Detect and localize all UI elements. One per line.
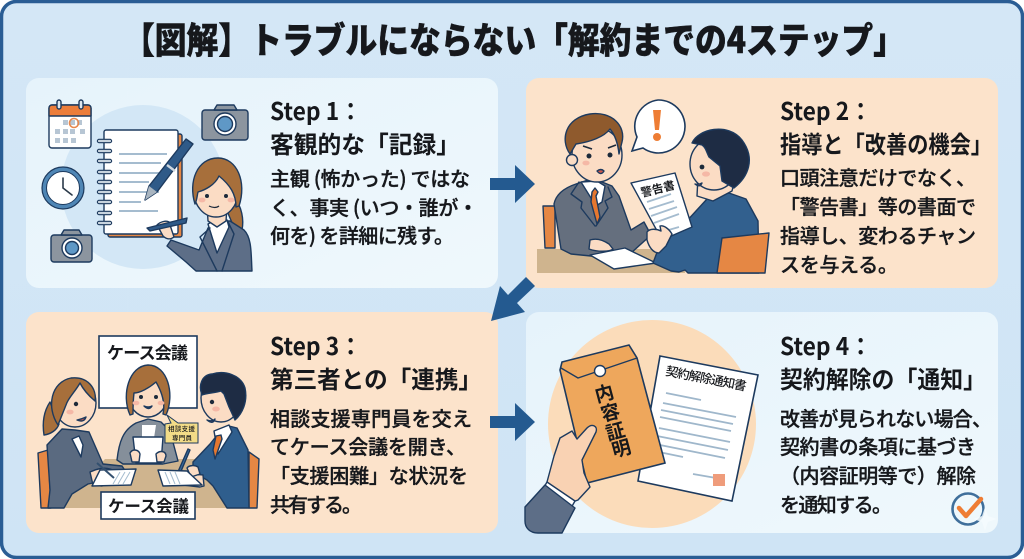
step 1 text: [270, 92, 478, 249]
step 4 text: [780, 327, 992, 518]
panel: step 1: [26, 78, 498, 288]
step 4 text: を通知する。: [780, 489, 892, 518]
paper on table: [590, 248, 656, 269]
step 1 text: 客観的な「記録」: [270, 125, 460, 160]
step 1 text: く、事実 (いつ・誰が・: [270, 192, 478, 221]
step 2 text: Step 2：: [780, 92, 872, 127]
step 2 text: 指導と「改善の機会」: [780, 125, 992, 160]
illustration: certified mail: [525, 320, 758, 533]
person: man right: [177, 373, 249, 508]
step 2 text: 指導し、変わるチャン: [780, 220, 976, 249]
icon: check mark: [952, 494, 997, 531]
person: supervisor: [554, 114, 651, 258]
envelope: [560, 345, 665, 483]
illustration: warning meeting: [537, 100, 769, 273]
person: woman left: [43, 378, 126, 508]
termination notice: 契約解除通知書: [664, 360, 748, 395]
panel: step 4: [525, 312, 998, 533]
icon: camera top: [202, 105, 248, 140]
chair right: [717, 233, 769, 273]
pen: [145, 139, 193, 200]
chairs: [38, 450, 259, 508]
speech bubble: [632, 100, 685, 153]
icon: calendar: [49, 100, 91, 148]
chair left: [543, 206, 555, 248]
label: consultation specialist: 専門員: [172, 432, 192, 442]
warning document: 警告書: [639, 177, 676, 201]
panel: step 3: [26, 312, 498, 533]
icon: camera bottom: [51, 230, 92, 262]
step 2 text: [780, 92, 992, 278]
step 2 text: 口頭注意だけでなく、: [780, 162, 976, 191]
illustration: case meeting: [38, 336, 259, 519]
step 4 text: （内容証明等で）解除: [780, 460, 976, 489]
step 4 text: Step 4：: [780, 327, 872, 362]
person: woman writing: [147, 158, 252, 271]
step 3 text: 相談支援専門員を交え: [270, 403, 472, 432]
step 4 text: 改善が見られない場合、: [780, 403, 992, 432]
envelope: 容: [597, 396, 623, 427]
step 3 text: てケース会議を開き、: [270, 431, 466, 460]
step 1 text: 何を) を詳細に残す。: [270, 220, 454, 249]
notebook: [99, 130, 182, 237]
arrow: step 2 to step 3: [491, 277, 535, 321]
envelope: 内: [591, 377, 617, 408]
table: [537, 249, 685, 273]
step 3 text: [270, 327, 482, 518]
title: 【図解】トラブルにならない「解約までの4ステップ」: [123, 12, 905, 64]
envelope: 証: [602, 415, 628, 446]
step 3 text: 「支援困難」な状況を: [270, 460, 468, 489]
person: employee head and hand: [647, 129, 749, 253]
label: consultation specialist: [165, 415, 198, 443]
step 2 text: スを与える。: [780, 249, 898, 278]
step 3 text: Step 3：: [270, 327, 362, 362]
warning document: [631, 173, 692, 240]
arrow: step 3 to step 4: [490, 403, 535, 441]
papers on table: [92, 469, 202, 486]
termination notice: [638, 356, 758, 501]
step 2 text: 「警告書」等の書面で: [780, 191, 976, 220]
step 4 text: 契約解除の「通知」: [780, 360, 986, 395]
label: case meeting: ケース会議: [108, 493, 190, 517]
label: consultation specialist: 相談支援: [168, 423, 196, 433]
panel: step 2: [526, 78, 998, 288]
arrow: step 1 to step 2: [490, 165, 535, 203]
step 3 text: 第三者との「連携」: [270, 360, 482, 395]
envelope: 明: [608, 432, 634, 463]
whiteboard: ケース会議: [107, 339, 188, 364]
step 1 text: Step 1：: [270, 92, 362, 127]
table: [60, 459, 237, 508]
icon: clock: [42, 167, 84, 209]
step 4 text: 契約書の条項に基づき: [780, 431, 976, 460]
person: woman centre: [117, 365, 178, 464]
step 1 text: 主観 (怖かった) ではな: [270, 163, 470, 192]
illustration: record keeping: [42, 100, 252, 271]
whiteboard: [99, 336, 197, 408]
hand holding envelope: [525, 425, 596, 533]
step 3 text: 共有する。: [270, 489, 362, 518]
person: employee body: [653, 193, 759, 273]
